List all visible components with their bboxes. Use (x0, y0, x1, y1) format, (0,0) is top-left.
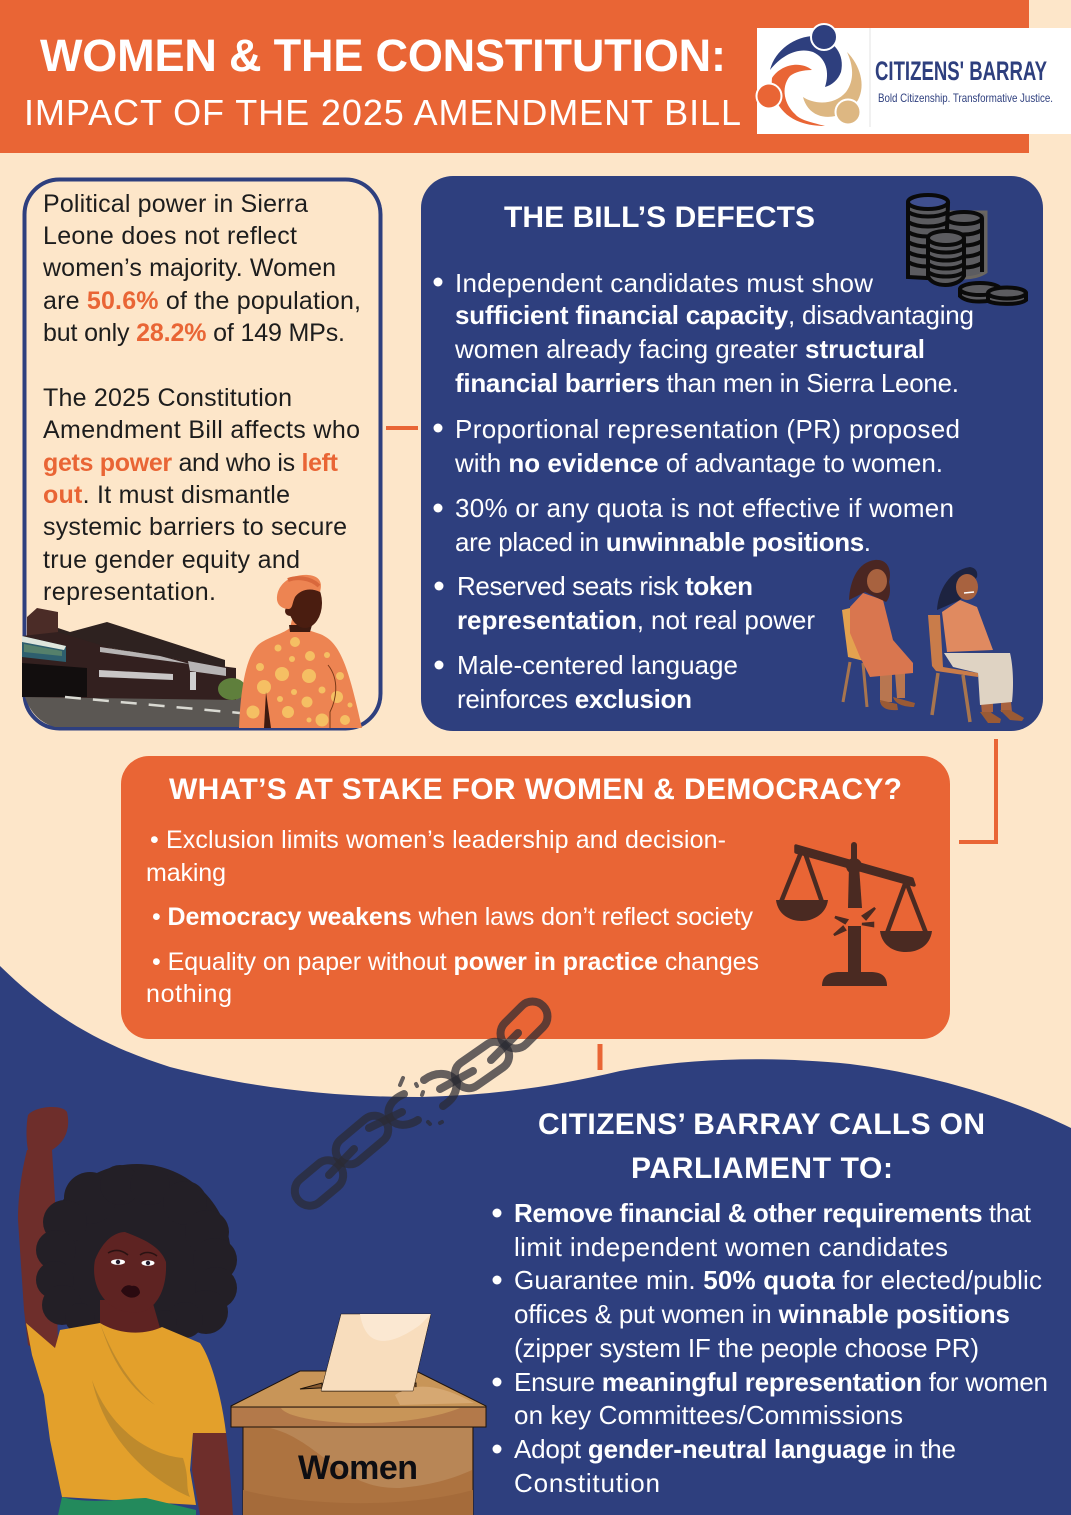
photo: parliament building (22, 608, 246, 727)
list: calls to action: (zipper system IF the people choose PR) (514, 1333, 979, 1363)
intro paragraph 2: gets power and who is left (43, 449, 339, 477)
list: stakes (146, 826, 759, 1008)
list: calls to action: Ensure meaningful representation for women (514, 1367, 1048, 1397)
list: calls to action: Adopt gender-neutral language in the (514, 1434, 956, 1464)
fist (26, 1107, 68, 1150)
list: defects: Proportional representation (PR) proposed (455, 414, 960, 444)
heading: calls on parliament: PARLIAMENT TO: (631, 1152, 893, 1185)
intro paragraph 1: Political power in Sierra (43, 190, 308, 218)
raised arm (18, 1150, 58, 1352)
intro paragraph 2: representation. (43, 578, 216, 606)
list: defects: women already facing greater structural (454, 334, 925, 364)
list: defects: Male-centered language (457, 650, 738, 680)
list: defects: Reserved seats risk token (457, 571, 753, 601)
intro paragraph 2: true gender equity and (43, 546, 300, 574)
header banner (0, 0, 1029, 153)
icon: broken scales of justice (776, 842, 932, 986)
illustration: woman in patterned cape (239, 575, 362, 728)
list: defects: 30% or any quota is not effective if women (455, 493, 954, 523)
list: calls to action: limit independent women candidates (514, 1232, 948, 1262)
list: calls to action: offices & put women in winnable positions (514, 1299, 1010, 1329)
panel: what's at stake (121, 756, 950, 1039)
illustration: seated women (842, 560, 1024, 723)
list: calls to action: on key Committees/Commissions (514, 1400, 903, 1430)
list: calls to action: Guarantee min. 50% quota for elected/public (514, 1265, 1042, 1295)
list: calls to action: Constitution (514, 1468, 660, 1498)
intro paragraph 1: are 50.6% of the population, (43, 287, 361, 315)
intro paragraph 2: Amendment Bill affects who (43, 416, 360, 444)
list: defects: are placed in unwinnable positions. (455, 527, 871, 557)
panel border (24, 180, 380, 728)
list: defects: financial barriers than men in Sierra Leone. (455, 368, 959, 398)
connector: defects to stake (959, 739, 996, 842)
list: calls to action: Remove financial & other requirements that (514, 1198, 1032, 1228)
heading: what's at stake: WHAT’S AT STAKE FOR WOMEN & DEMOCRACY? (169, 773, 902, 806)
intro paragraph 2: systemic barriers to secure (43, 513, 347, 541)
heading: calls on parliament: CITIZENS’ BARRAY CALLS ON (538, 1108, 985, 1141)
ballot paper (321, 1314, 431, 1391)
intro paragraph 1: Leone does not reflect (43, 222, 297, 250)
icon: coin stacks (908, 195, 1026, 304)
panel: the bill's defects (421, 176, 1043, 731)
heading: the bill's defects: THE BILL’S DEFECTS (504, 201, 815, 234)
heading: calls on parliament (538, 1108, 985, 1185)
list: defects: Independent candidates must show (455, 268, 873, 298)
intro paragraph 1: women’s majority. Women (42, 254, 336, 282)
list: defects: sufficient financial capacity, disadvantaging (455, 300, 974, 330)
list: defects: reinforces exclusion (457, 684, 692, 714)
connector: intro to defects (386, 426, 418, 430)
illustration: woman with raised fist (18, 1107, 237, 1515)
panel: intro (22, 180, 380, 728)
intro paragraph 2: out. It must dismantle (43, 481, 290, 509)
title: WOMEN & THE CONSTITUTION: (40, 30, 726, 81)
trousers (58, 1497, 196, 1515)
list: stakes: nothing (146, 980, 232, 1008)
blue wave background (0, 966, 1071, 1515)
connector: stake to calls (598, 1044, 602, 1070)
shirt (26, 1323, 226, 1505)
face (94, 1232, 166, 1312)
list: defects (434, 268, 974, 714)
list: stakes: making (146, 859, 226, 887)
label: Women on ballot box: Women (298, 1449, 418, 1487)
logo: Citizens' Barray (756, 24, 1071, 134)
intro paragraph 2 (43, 384, 360, 606)
intro paragraph 2: The 2025 Constitution (43, 384, 292, 412)
eyes and mouth (108, 1251, 157, 1298)
intro paragraph 1 (42, 190, 361, 347)
icon: broken chain (289, 995, 554, 1212)
hair (36, 1164, 237, 1352)
list: defects: with no evidence of advantage to women. (454, 448, 943, 478)
list: stakes: • Exclusion limits women’s leadership and decision- (150, 826, 726, 854)
subtitle: IMPACT OF THE 2025 AMENDMENT BILL (24, 92, 741, 133)
intro paragraph 1: but only 28.2% of 149 MPs. (43, 319, 345, 347)
neck (100, 1300, 160, 1334)
list: stakes: • Equality on paper without power in practice changes (152, 948, 759, 976)
list: calls to action (492, 1198, 1048, 1498)
illustration: ballot box (231, 1314, 486, 1515)
list: stakes: • Democracy weakens when laws don’t reflect society (152, 903, 754, 931)
list: defects: representation, not real power (457, 605, 815, 635)
lower arm (192, 1433, 233, 1515)
